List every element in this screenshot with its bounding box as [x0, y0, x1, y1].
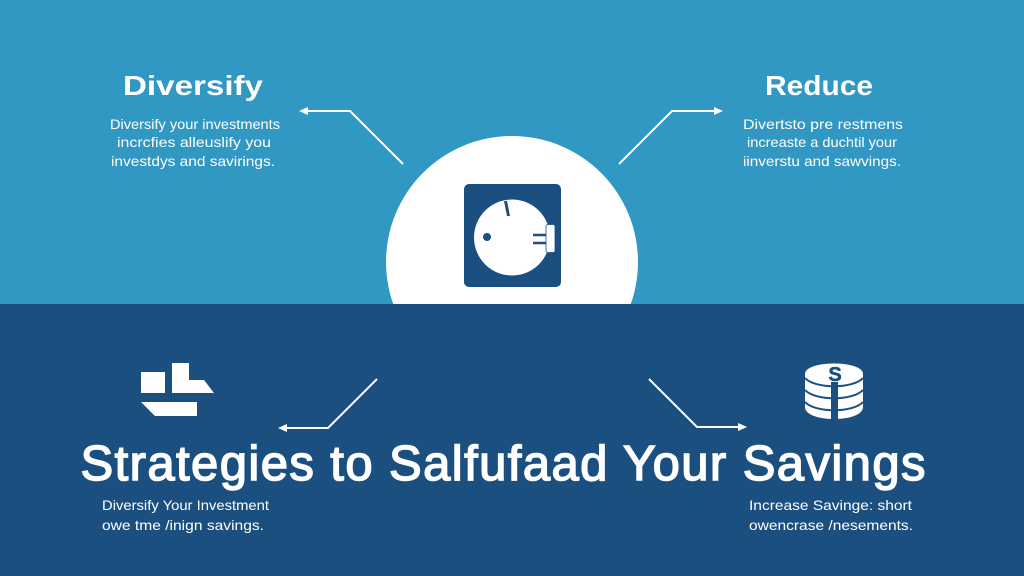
- text block: Diversify description: [110, 116, 280, 169]
- icon: building blocks: [141, 363, 214, 416]
- icon: coin stack: S: [828, 364, 842, 386]
- text block: Diversify description: Diversify your investments: [110, 116, 280, 132]
- text block: bottom left description: [102, 497, 269, 533]
- icon: coin stack: [805, 364, 863, 419]
- text block: bottom right description: [749, 497, 913, 533]
- heading: Diversify: Diversify: [123, 70, 263, 101]
- arrow: top left: [299, 107, 403, 164]
- arrow: top right: [619, 107, 723, 164]
- text block: bottom right description: owencrase /nesements.: [749, 517, 913, 533]
- heading: Reduce: Reduce: [765, 70, 873, 101]
- icon: safe dial: [464, 184, 561, 287]
- panel: bottom background: [0, 304, 1024, 576]
- text block: Reduce description: iinverstu and sawvings.: [743, 153, 901, 169]
- text block: Diversify description: incrcfies alleuslify you: [117, 134, 271, 150]
- arrow: bottom right: [649, 379, 747, 431]
- text block: Reduce description: Divertsto pre restmens: [743, 116, 903, 132]
- title: Strategies to Salfufaad Your Savings: [80, 437, 926, 491]
- text block: Reduce description: increaste a duchtil your: [747, 134, 897, 150]
- text block: bottom left description: owe tme /inign savings.: [102, 517, 264, 533]
- panel: top background: [0, 0, 1024, 304]
- central white circle: [386, 136, 638, 388]
- text block: bottom right description: Increase Savinge: short: [749, 497, 912, 513]
- arrow: bottom left: [278, 379, 377, 432]
- text block: Reduce description: [743, 116, 903, 169]
- text block: Diversify description: investdys and savirings.: [111, 153, 275, 169]
- text block: bottom left description: Diversify Your Investment: [102, 497, 269, 513]
